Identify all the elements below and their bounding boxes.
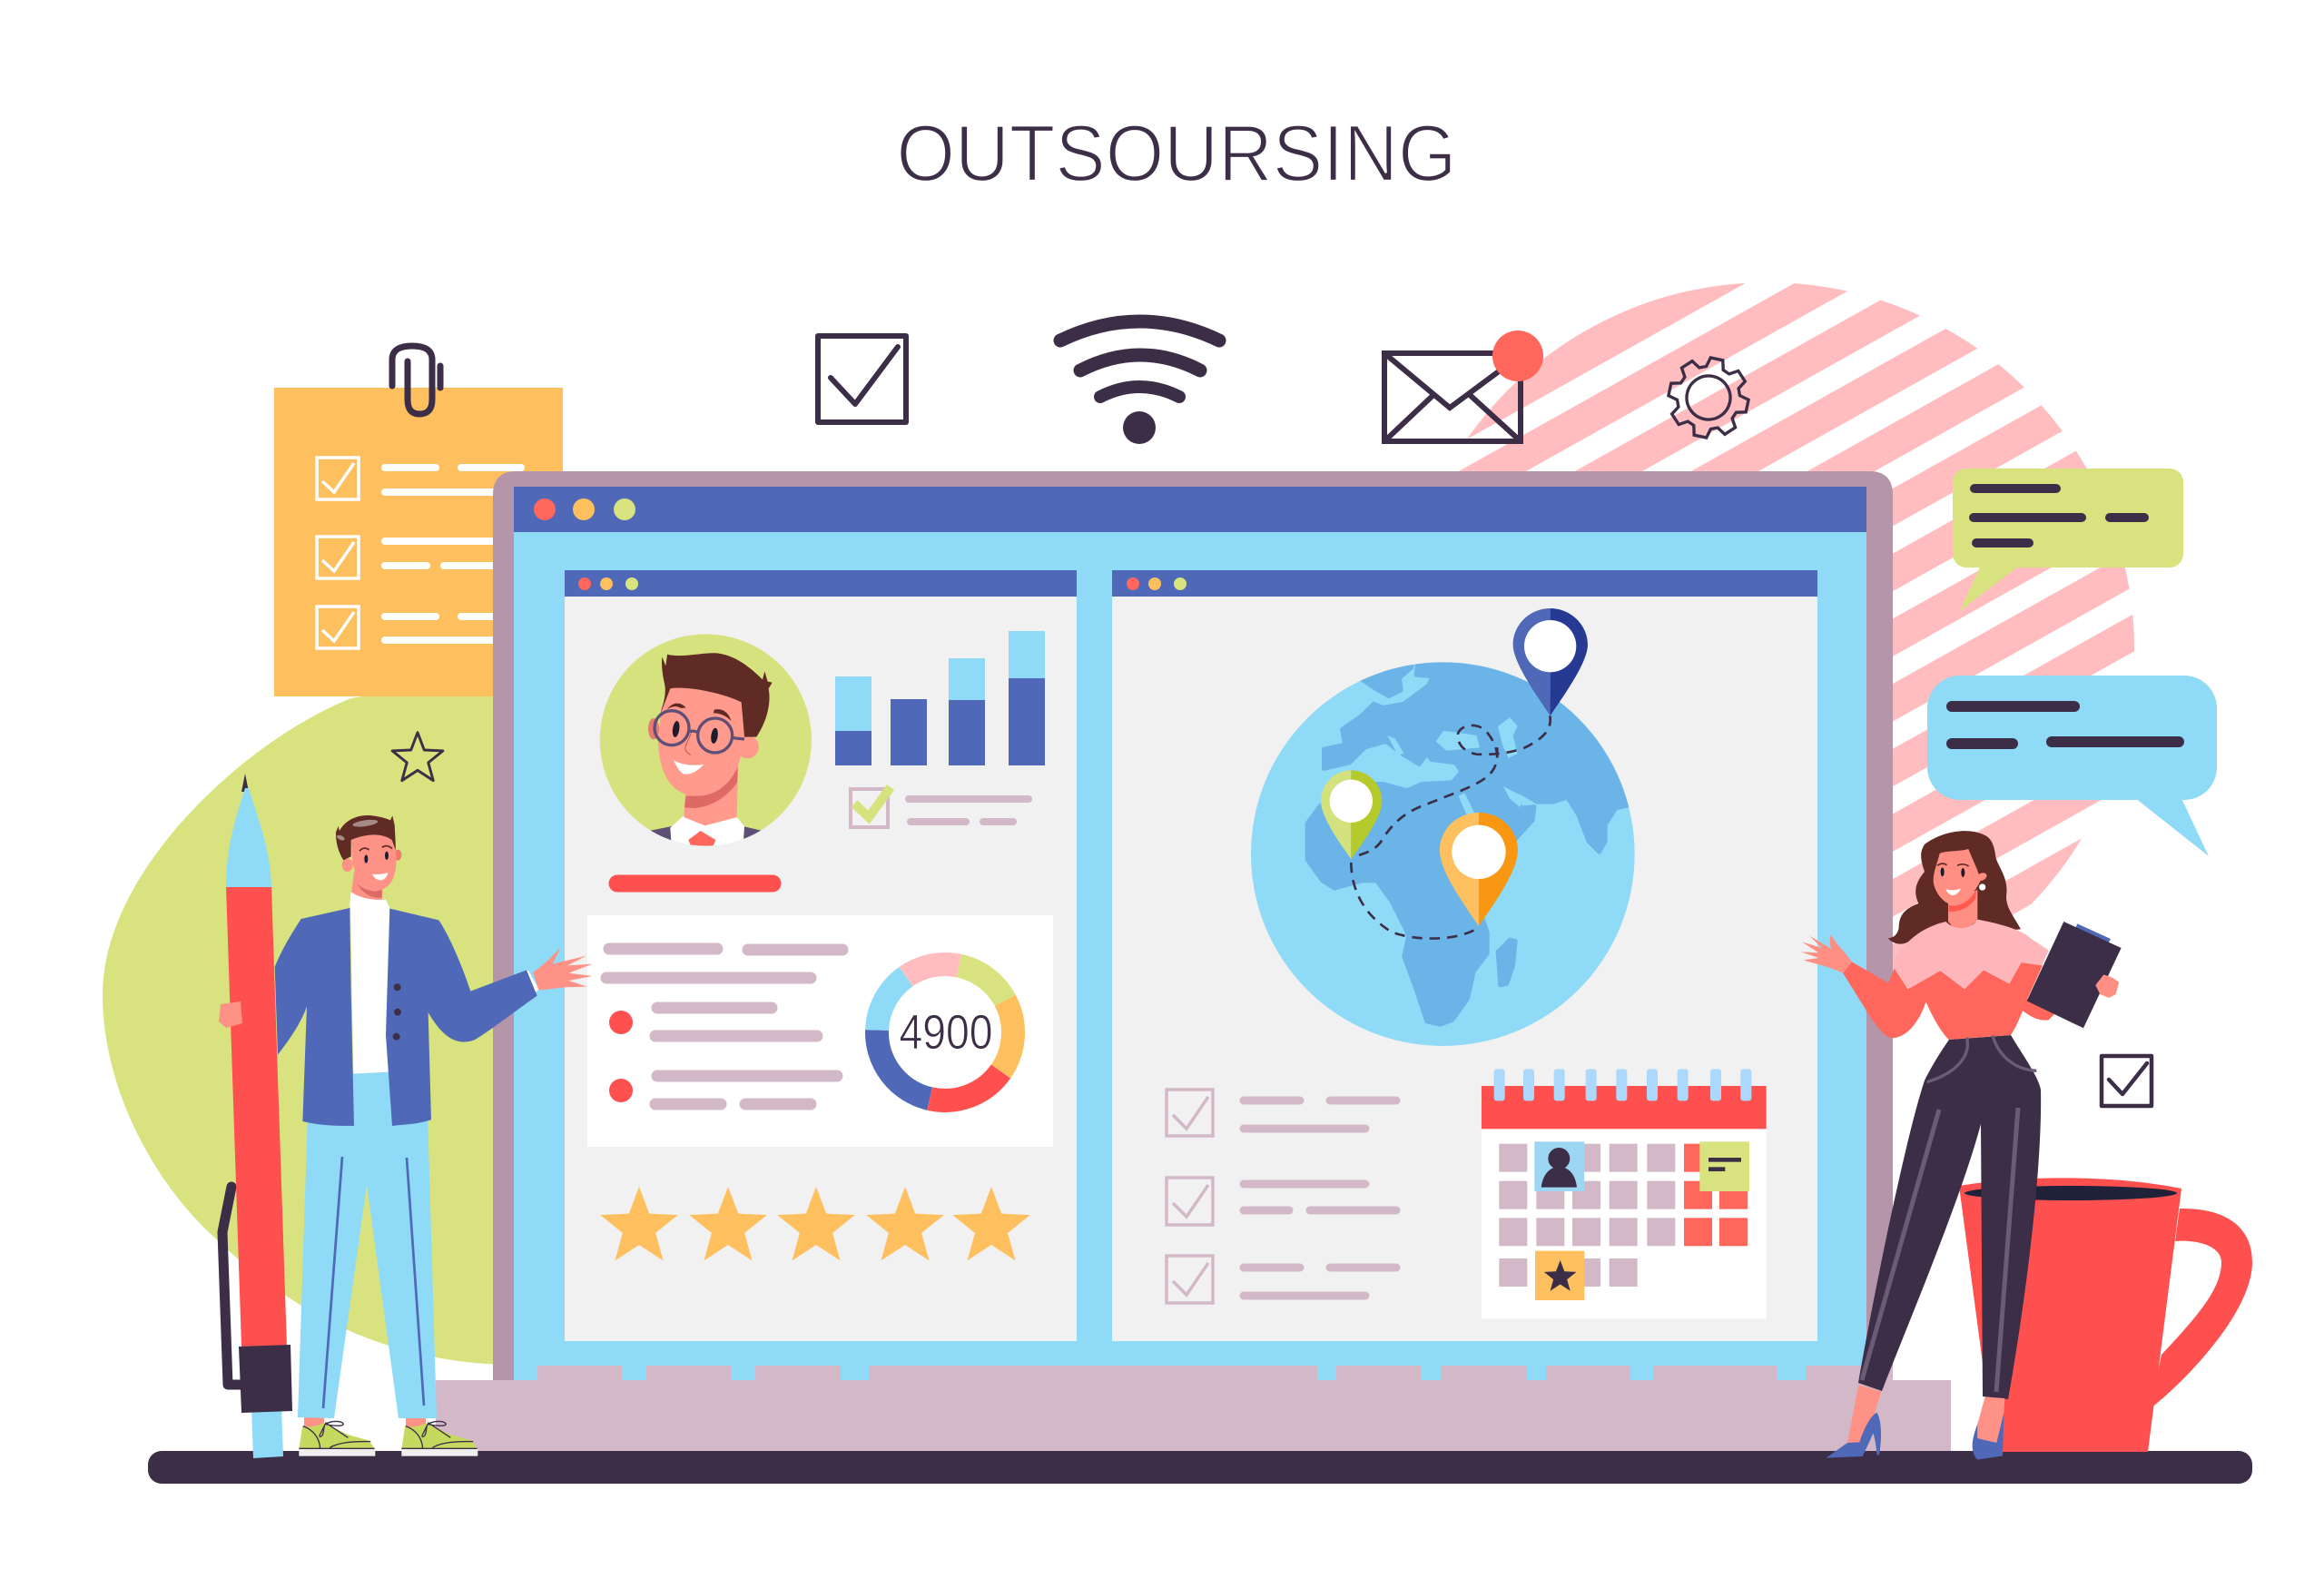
icon: gear bbox=[1661, 350, 1756, 445]
orange checklist note bbox=[274, 346, 563, 696]
woman's upper body bbox=[1801, 831, 2122, 1082]
panel: left window bbox=[565, 570, 1077, 1341]
background: pink striped circle bbox=[1459, 283, 2134, 977]
woman's feet and heels bbox=[1827, 1385, 2004, 1460]
red name bar bbox=[617, 875, 773, 892]
paperclip icon bbox=[392, 346, 440, 414]
globe with map pins bbox=[1251, 608, 1659, 1046]
pin: green bbox=[1321, 770, 1382, 859]
laptop base notches bbox=[622, 1366, 1806, 1380]
monitor bbox=[493, 471, 1893, 1380]
man's upper body bbox=[275, 815, 593, 1126]
avatar portrait bbox=[600, 634, 812, 851]
panel: right window bbox=[1112, 570, 1817, 1341]
floor bar bbox=[148, 1451, 2252, 1484]
man's trousers bbox=[298, 1071, 437, 1432]
icon: checkbox top bbox=[818, 336, 906, 422]
five star rating bbox=[600, 1187, 1030, 1260]
white stats card bbox=[587, 915, 1053, 1147]
man's left shoe bbox=[299, 1421, 375, 1456]
pin: orange bbox=[1440, 813, 1518, 926]
bar chart bbox=[835, 631, 1045, 765]
clipboard bbox=[2027, 922, 2122, 1028]
man presenting bbox=[275, 815, 593, 1456]
laptop base bbox=[436, 1366, 1951, 1453]
checklist rows bbox=[1167, 1090, 1396, 1303]
donut chart bbox=[851, 938, 1039, 1127]
title: OUTSOURSING bbox=[897, 108, 1456, 198]
icon: outline star bbox=[392, 733, 443, 781]
donut chart: 4900 bbox=[899, 1005, 993, 1060]
icon: small checkbox right bbox=[2102, 1056, 2152, 1106]
icon: wifi bbox=[1060, 321, 1219, 444]
icon: envelope with notification bbox=[1384, 331, 1543, 441]
background: green blob bbox=[103, 672, 508, 1365]
pin: blue bbox=[1513, 608, 1588, 715]
small check with text lines bbox=[851, 787, 1029, 827]
calendar bbox=[1482, 1069, 1767, 1318]
giant pen bbox=[219, 774, 292, 1458]
man's right shoe bbox=[401, 1421, 478, 1456]
woman presenting bbox=[1801, 831, 2122, 1460]
speech bubble: green bbox=[1953, 469, 2183, 611]
coffee mug bbox=[1959, 1178, 2252, 1452]
speech bubble: blue bbox=[1927, 676, 2217, 856]
man's hand on pen bbox=[219, 1002, 242, 1028]
woman's legs bbox=[1858, 1035, 2041, 1399]
